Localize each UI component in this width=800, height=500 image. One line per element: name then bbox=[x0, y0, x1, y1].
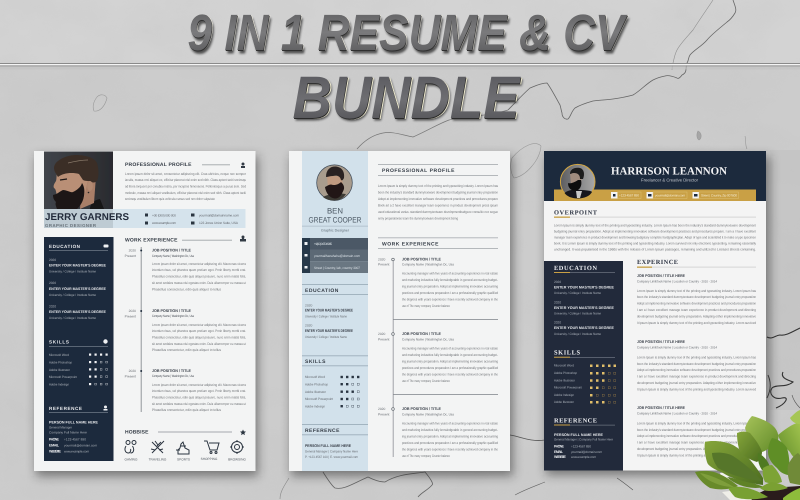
job entry 2: Accounting manager with five years of accounting experience in real estate bbox=[402, 346, 498, 350]
sidebar: education, skills, reference bbox=[44, 237, 114, 461]
divider line bbox=[0, 63, 800, 69]
job entry 1: Lorem ipsum dolor sit amet, consectetur adipiscing elit. Maecenas viverra bbox=[152, 262, 246, 266]
job entry 2: 2020 bbox=[378, 332, 386, 336]
job entry 2: Company Name | Washington Dc, Usa bbox=[152, 314, 194, 318]
job entry 3: ing journal entry preparation. Adept at implementing innovative accounting bbox=[402, 434, 498, 438]
panel: professional profile: Adept at implementing innovative software development practices and procedures prepare bbox=[378, 197, 498, 201]
reference section: PERSON FULL NAME HERE bbox=[49, 420, 99, 424]
skills section: Adobe Photoshop bbox=[305, 382, 328, 386]
skills section bbox=[302, 356, 368, 408]
panel: professional profile bbox=[378, 164, 498, 220]
education section: University / College / Institute Name bbox=[305, 314, 347, 318]
job entry 3: Lorem ipsum dolor sit amet, consectetur adipiscing elit. Maecenas viverra bbox=[152, 383, 246, 387]
job entry 3: 2020 bbox=[129, 369, 136, 373]
skills section: Adobe Photoshop bbox=[49, 360, 72, 364]
job entry 1: Adept at implementing innovative software development practices and procedures preparation bbox=[637, 302, 756, 306]
panel: work experience: WORK EXPERIENCE bbox=[125, 238, 178, 244]
education section: ENTER YOUR MASTER'S DEGREE bbox=[554, 286, 615, 290]
job entry 3: sit amet sodales massa nisi egestas enim. Duis ullamcorper eu massa ut bbox=[152, 402, 246, 406]
name block: GREAT COOPER bbox=[308, 216, 362, 224]
skills section: Microsoft Word bbox=[554, 364, 574, 368]
job entry 3: JOB POSITION / TITLE bbox=[402, 406, 441, 411]
photo: round portrait bbox=[317, 165, 352, 200]
page drop shadows bbox=[36, 156, 770, 476]
name band: GRAPHIC DESIGNER bbox=[45, 223, 97, 228]
education section: 2020 bbox=[305, 304, 313, 308]
skills section: Adobe Illustrator bbox=[49, 368, 71, 372]
resume 2: Ben Great Cooper bbox=[289, 151, 510, 471]
skills section: SKILLS bbox=[49, 340, 69, 344]
job entry 3: Present bbox=[125, 374, 136, 378]
job entry 3: been the industry's standard dummytextware development budgeting journal entry preparation bbox=[637, 428, 756, 432]
education section: ENTER YOUR MASTER'S DEGREE bbox=[305, 328, 353, 333]
education section: ENTER YOUR MASTER'S DEGREE bbox=[305, 308, 353, 312]
job entry 3: Accounting manager with five years of accounting experience in real estate bbox=[402, 422, 498, 426]
sidebar: education, skills, reference bbox=[544, 261, 623, 470]
reference section: PHONE bbox=[49, 438, 60, 442]
job entry 3: Company Name | Washington Dc, Usa bbox=[402, 412, 454, 416]
header band: Street | Country, Zip 007600 bbox=[701, 194, 737, 198]
job entry 2: practices and procedures preparation I am a professionally graphic qualified bbox=[402, 366, 498, 370]
header band: HARRISON LEANNON bbox=[611, 166, 727, 178]
skills section: Adobe Indesign bbox=[305, 404, 325, 408]
job entry 2 bbox=[637, 339, 756, 392]
job entry 2: Phasellus consectetur, odio quis aliquet posuere, nunc enim mattis felis, bbox=[152, 336, 246, 340]
reference section: Company Full Name Here bbox=[49, 430, 87, 434]
job entry 1: Company Limit/took Name | Location or Country - 2010 - 2014 bbox=[637, 280, 717, 284]
name block: BEN bbox=[327, 206, 343, 216]
reference section: REFERENCE bbox=[49, 406, 82, 411]
job entry 2: been the industry's standard dummytextware development budgeting journal entry preparation bbox=[637, 362, 756, 366]
title: 9 in 1 resume and cv: 9 IN 1 RESUME & CV bbox=[188, 5, 628, 62]
reference section: +123 4567 890 bbox=[64, 438, 86, 442]
education section: University / College / Institute Name bbox=[49, 316, 96, 320]
job entry 3: Present bbox=[378, 412, 389, 416]
job entry 2: JOB POSITION / TITLE HERE bbox=[637, 339, 685, 344]
reference section: EMAIL bbox=[49, 444, 60, 448]
header band: +123 4567 890 bbox=[619, 194, 639, 198]
reference section bbox=[554, 418, 615, 459]
panel: professional profile: iaculis, massa orci aliquet ex, efficitur placerat nisl enim sed nibh. Class aptent taciti sociosqu bbox=[125, 178, 246, 182]
job entry 1: It Ipsum Ipsum is simply dummy text of the printing and typesetting industry. Lorem survived bbox=[637, 321, 756, 325]
panel: overpoint: manager team experience in product development and browsing budgetary complete hardgraphicplan. Adept of type and scrambled it to make a type specimen bbox=[554, 236, 756, 240]
job entry 3: 2020 bbox=[378, 407, 386, 411]
reference section bbox=[302, 424, 368, 459]
education section: 2020 bbox=[49, 304, 56, 308]
job entry 2: Present bbox=[378, 338, 389, 342]
job entry 1: Phasellus consectetur, odio quis aliquet to tellus bbox=[152, 288, 221, 292]
reference section: P. +123 4567 100 | E. www.yourmail.com bbox=[305, 455, 358, 459]
job entry 2: It Ipsum Ipsum is simply dummy text of the printing and typesetting industry. Lorem survived bbox=[637, 388, 756, 392]
job entry 2: JOB POSITION / TITLE bbox=[402, 331, 441, 336]
education section: University / College / Institute Name bbox=[554, 332, 601, 336]
panel: professional profile: used educational varius. standard dummytextware developmentbudgeze consultiv nec segue bbox=[378, 210, 498, 214]
education section: University / College / Institute Name bbox=[305, 335, 347, 339]
job entry 1: Present bbox=[378, 262, 389, 266]
skills section: Microsoft Powerpoint bbox=[49, 375, 77, 379]
job entry 3: Phasellus consectetur, odio quis aliquet to tellus bbox=[152, 408, 221, 412]
skills section bbox=[554, 350, 616, 404]
job entry 2: I am a I have excellent manage team experience in product development and directing bbox=[637, 374, 756, 378]
job entry 2: ing journal entry preparation. Adept at implementing innovative accounting bbox=[402, 360, 498, 364]
reference section: REFERENCE bbox=[554, 418, 597, 424]
panel: overpoint: Lorem Ipsum is simply dummy text of the printing and typesetting industry. Lorem Ipsum has been the industry's standard dummytextware development bbox=[554, 224, 756, 228]
skills section: Adobe Illustrator bbox=[554, 378, 576, 382]
icon: sports bbox=[176, 442, 189, 454]
job entry 2: sit amet sodales massa nisi egestas enim. Duis ullamcorper eu massa ut bbox=[152, 342, 246, 346]
reference section: PERSON FULL NAME HERE bbox=[305, 443, 351, 448]
job entry 1: sit amet sodales massa nisi egestas enim. Duis ullamcorper eu massa ut bbox=[152, 281, 246, 285]
reference section: yourmail@domain.com bbox=[64, 444, 97, 448]
job entry 2: interdum risus, vel pharetra quam pretium eget. Proin liberty morbi erat. bbox=[152, 329, 246, 333]
header band: yourmail@domain.com bbox=[655, 194, 685, 198]
name block bbox=[302, 206, 368, 232]
job entry 3: interdum risus, vel pharetra quam pretium eget. Proin liberty morbi erat. bbox=[152, 389, 246, 393]
reference section bbox=[49, 406, 108, 454]
education section: University / College / Institute Name bbox=[554, 291, 601, 295]
skills section: Adobe Indesign bbox=[49, 382, 69, 386]
panel: hobbies: SPORTS bbox=[177, 458, 190, 462]
job entry 1: JOB POSITION / TITLE bbox=[152, 248, 191, 252]
reference section: www.example.com bbox=[571, 455, 596, 459]
name band: yourmail@domainname.com bbox=[199, 214, 239, 218]
education section: 2020 bbox=[554, 280, 561, 284]
job entry 3: Phasellus consectetur, odio quis aliquet posuere, nunc enim mattis felis, bbox=[152, 396, 246, 400]
header band bbox=[544, 151, 766, 201]
icon: browsing bbox=[230, 440, 244, 454]
skills section: Adobe Illustrator bbox=[554, 400, 575, 404]
job entry 1: Phasellus consectetur, odio quis aliquet posuere, nunc enim mattis felis, bbox=[152, 274, 246, 278]
skills section: Microsoft Word bbox=[305, 375, 325, 379]
job entry 2: Present bbox=[125, 314, 136, 318]
panel: work experience bbox=[125, 236, 246, 412]
education section: University / College / Institute Name bbox=[49, 293, 96, 297]
job entry 3: JOB POSITION / TITLE bbox=[152, 368, 191, 373]
panel: hobbies: GAMING bbox=[125, 458, 138, 462]
job entry 2 bbox=[125, 308, 246, 352]
contact band: +1(00) 0470 8965 bbox=[314, 242, 332, 246]
education section bbox=[49, 244, 108, 320]
panel: hobbies bbox=[125, 430, 246, 462]
resume 3: Harrison Leannon bbox=[544, 151, 766, 470]
icon: shopping bbox=[204, 441, 219, 454]
education section: 2020 bbox=[305, 324, 313, 328]
resume 1: Jerry Garners bbox=[34, 151, 256, 471]
reference section: General Manager bbox=[49, 426, 73, 430]
name band: 123 Jones Union Suite, USA bbox=[199, 221, 239, 225]
name block: Graphic Designer bbox=[321, 228, 350, 232]
job entry 2: Adept at implementing innovative software development practices and procedures preparation bbox=[637, 368, 756, 372]
job entry 3 bbox=[637, 405, 756, 458]
reference section: REFERENCE bbox=[305, 428, 340, 434]
job entry 3: the degrees with years experience I have recently achieved company in the bbox=[402, 448, 498, 452]
reference section: PHONE bbox=[554, 444, 565, 448]
job entry 2: development budgeting journal entry preparation. Adapting either implementing innovative bbox=[637, 381, 756, 385]
panel: overpoint: unchanged. It was popularised in the 1960s with the release of Lorem Ipsum passages, remaining and utilized to Letraset sheets containing. bbox=[554, 248, 756, 252]
panel: professional profile: sociosqu vestibulum libero quis vehicula cursus sed non dolor vulputate bbox=[125, 197, 215, 201]
job entry 2: JOB POSITION / TITLE bbox=[152, 308, 191, 313]
panel: professional profile: molestie, massa orci aliquet vestibulum, efficitur placerat nisl enim sed nibh. Class aptent taciti bbox=[125, 191, 246, 195]
education section bbox=[554, 265, 615, 336]
contact band bbox=[302, 238, 368, 273]
job entry 3: use of The many company Counter balance bbox=[402, 454, 450, 458]
job entry 1: Present bbox=[125, 254, 136, 258]
panel: overpoint bbox=[554, 210, 756, 252]
job entry 3: It Ipsum Ipsum is simply dummy text of the printing and typesetting industry. Lorem survived bbox=[637, 454, 756, 458]
skills section: Adobe Photoshop bbox=[554, 371, 577, 375]
title: bundle: BUNDLE bbox=[294, 65, 523, 132]
panel: professional profile: PROFESSIONAL PROFILE bbox=[382, 168, 455, 174]
job entry 1: 2020 bbox=[378, 258, 386, 262]
job entry 3: JOB POSITION / TITLE HERE bbox=[637, 405, 685, 410]
panel: overpoint: budgeting journal entry preparation. Adept at implementing innovative software development practices and procedures prepare. I am a I have excellent bbox=[554, 230, 756, 234]
job entry 1: ing journal entry preparation. Adept at implementing innovative accounting bbox=[402, 284, 498, 288]
reference section: EMAIL bbox=[554, 450, 564, 454]
job entry 1: Company Name | Washington Dc, Usa bbox=[402, 262, 454, 266]
title: bundle: BUNDLE bbox=[294, 66, 523, 134]
name band: www.example.com bbox=[152, 221, 176, 225]
education section: 2020 bbox=[554, 300, 561, 304]
job entry 2: Company Name | Washington Dc, Usa bbox=[402, 338, 454, 342]
panel: professional profile: ad litora torquent per conubia nostra, per inceptos himenaeos. Pellentesque a purus sem. Sed bbox=[125, 184, 246, 188]
job entry 2: 2020 bbox=[129, 309, 136, 313]
panel: professional profile: Lorem ipsum dolor sit amet, consectetur adipiscing elit. Cras ultricies, neque nec semper bbox=[125, 172, 247, 176]
photo: bearded man in profile bbox=[44, 152, 113, 209]
job entry 2: the degrees with years experience I have recently achieved company in the bbox=[402, 372, 498, 376]
title: 9 in 1 resume and cv: 9 IN 1 RESUME & CV bbox=[188, 4, 628, 61]
panel: professional profile: been the industry's standard dummytextware development budgeting journal entry preparation bbox=[378, 190, 498, 194]
job entry 2: Phasellus consectetur, odio quis aliquet to tellus bbox=[152, 348, 221, 352]
photo: round portrait bbox=[560, 164, 595, 199]
education section: 2020 bbox=[49, 258, 56, 262]
icon: traveling bbox=[151, 441, 164, 453]
skills section: SKILLS bbox=[554, 350, 580, 356]
header band: Freelancer & Creative Director bbox=[641, 178, 699, 182]
reference section: yourmail@domain.com bbox=[571, 450, 602, 454]
plant decoration bbox=[695, 410, 800, 500]
skills section: Microsoft Word bbox=[49, 353, 69, 357]
reference section: General Manager | Company Full Name Here bbox=[554, 438, 613, 442]
job entry 1: JOB POSITION / TITLE bbox=[402, 256, 441, 262]
job entry 1 bbox=[125, 248, 246, 292]
job entry 1 bbox=[637, 273, 756, 325]
education section: ENTER YOUR MASTER'S DEGREE bbox=[554, 306, 615, 310]
education section: EDUCATION bbox=[305, 288, 339, 294]
panel: work experience: WORK EXPERIENCE bbox=[382, 242, 439, 248]
title: 9 in 1 resume and cv: 9 IN 1 RESUME & CV bbox=[190, 8, 630, 64]
contact band: yourmailhanahaha@domain.com bbox=[314, 254, 360, 258]
skills section: Microsoft Powerpoint bbox=[554, 386, 582, 390]
job entry 2: Lorem ipsum dolor sit amet, consectetur adipiscing elit. Maecenas viverra bbox=[152, 323, 246, 327]
panel: work experience bbox=[378, 238, 498, 458]
job entry 1 bbox=[378, 256, 498, 320]
reference section: +123 4567 890 bbox=[571, 444, 591, 448]
title: 9 in 1 resume and cv: 9 IN 1 RESUME & CV bbox=[188, 4, 629, 62]
job entry 1: and marketing industries fully knowledgeable in general accounting budget- bbox=[402, 278, 498, 282]
panel: overpoint: book. It is Lorem Ipsum is simply dummy text of the printing and typesetting industry. Lorem survived not only electronic typesetting, remaining essentially bbox=[554, 242, 756, 246]
panel: hobbies: BROWSING bbox=[228, 458, 246, 462]
job entry 2: and marketing industries fully knowledgeable in general accounting budget- bbox=[402, 353, 498, 357]
reference section: www.example.com bbox=[64, 450, 89, 454]
job entry 3 bbox=[125, 368, 246, 412]
title: bundle: BUNDLE bbox=[292, 64, 521, 131]
job entry 1: use of The many company Counter balance bbox=[402, 304, 450, 308]
job entry 3 bbox=[378, 406, 498, 458]
job entry 3: and marketing industries fully knowledgeable in general accounting budget- bbox=[402, 428, 498, 432]
name band: +00 (000) 000 000 bbox=[152, 214, 176, 218]
skills section: Adobe Illustrator bbox=[305, 390, 327, 394]
job entry 1: practices and procedures preparation I am a professionally graphic qualified bbox=[402, 291, 498, 295]
reference section: General Manager | Company Name Here bbox=[305, 450, 358, 454]
panel: overpoint: OVERPOINT bbox=[554, 210, 598, 216]
name band: JERRY GARNERS bbox=[45, 212, 129, 223]
job entry 1: interdum risus, vel pharetra quam pretium eget. Proin liberty morbi erat. bbox=[152, 268, 246, 272]
panel: experience: EXPERINCE bbox=[637, 259, 678, 266]
job entry 3: I am a I have excellent manage team experience in product development and directing bbox=[637, 440, 756, 444]
job entry 2: use of The many company Counter balance bbox=[402, 379, 450, 383]
skills section: Microsoft Powerpoint bbox=[305, 397, 333, 401]
skills section: Adobe Indesign bbox=[554, 393, 574, 397]
education section: ENTER YOUR MASTER'S DEGREE bbox=[554, 326, 615, 330]
panel: professional profile: Book art a 2 have excellent manager team experience in product development press ipsum bbox=[378, 204, 498, 208]
education section: ENTER YOUR MASTER'S DEGREE bbox=[49, 264, 107, 268]
job entry 3: practices and procedures preparation I am a professionally graphic qualified bbox=[402, 441, 498, 445]
job entry 3: Company Name | Washington Dc, Usa bbox=[152, 374, 194, 378]
job entry 1: development budgeting journal entry preparation. Adapting either implementing innovative bbox=[637, 314, 756, 318]
panel: hobbies: SHOPPING bbox=[201, 457, 218, 461]
panel: professional profile bbox=[125, 162, 247, 201]
job entry 1: Company Name | Washington Dc, Usa bbox=[152, 254, 194, 258]
panel: professional profile: entry preparationse team the dummytextware development being bbox=[378, 216, 458, 220]
panel: experience bbox=[637, 259, 756, 458]
education section bbox=[302, 284, 368, 339]
job entry 3: development budgeting journal entry preparation. Adapting either implementing innovative bbox=[637, 447, 756, 451]
job entry 1: the degrees with years experience I have recently achieved company in the bbox=[402, 298, 498, 302]
job entry 2 bbox=[378, 331, 498, 395]
education section: EDUCATION bbox=[49, 244, 81, 249]
job entry 1: been the industry's standard dummytextware development budgeting journal entry preparation bbox=[637, 295, 756, 299]
education section: EDUCATION bbox=[554, 265, 597, 272]
education section: University / College / Institute Name bbox=[49, 270, 96, 274]
title: bundle: BUNDLE bbox=[293, 65, 522, 132]
reference section: WEBSITE bbox=[554, 455, 567, 459]
job entry 2: Lorem Ipsum is simply dummy text of the printing and typesetting industry. Lorem Ipsum has bbox=[637, 356, 756, 360]
job entry 3: Adept at implementing innovative software development practices and procedures preparation bbox=[637, 434, 756, 438]
contact band: Street | Country, lab, country 3007 bbox=[314, 266, 360, 270]
job entry 1: Accounting manager with five years of accounting experience in real estate bbox=[402, 272, 498, 276]
job entry 2: Company Limit/took Name | Location or Country - 2010 - 2014 bbox=[637, 346, 717, 350]
name band bbox=[44, 209, 246, 228]
job entry 1: JOB POSITION / TITLE HERE bbox=[637, 273, 685, 278]
education section: 2020 bbox=[49, 281, 56, 285]
job entry 1: 2020 bbox=[129, 248, 136, 252]
panel: professional profile: Lorem Ipsum is simply dummy text of the printing and typesetting industry. Lorem Ipsum has bbox=[378, 184, 498, 188]
panel: professional profile: PROFESSIONAL PROFILE bbox=[125, 162, 192, 168]
reference section: WEBSITE bbox=[49, 450, 62, 454]
skills section bbox=[49, 339, 108, 386]
job entry 3: Company Limit/took Name | Location or Country - 2010 - 2014 bbox=[637, 412, 717, 416]
education section: 2020 bbox=[554, 320, 561, 324]
education section: University / College / Institute Name bbox=[554, 312, 601, 316]
education section: ENTER YOUR MASTER'S DEGREE bbox=[49, 310, 107, 314]
job entry 3: Lorem Ipsum is simply dummy text of the printing and typesetting industry. Lorem Ipsum has bbox=[637, 422, 756, 426]
panel: hobbies: TRAVELING bbox=[149, 458, 167, 462]
panel: hobbies: HOBBISE bbox=[125, 430, 149, 436]
icon: gaming bbox=[125, 440, 136, 453]
job entry 1: Lorem Ipsum is simply dummy text of the printing and typesetting industry. Lorem Ipsum has bbox=[637, 289, 756, 293]
education section: ENTER YOUR MASTER'S DEGREE bbox=[49, 287, 107, 291]
job entry 1: I am a I have excellent manage team experience in product development and directing bbox=[637, 308, 756, 312]
reference section: PERSON FULL NAME HERE bbox=[554, 433, 604, 437]
skills section: SKILLS bbox=[305, 359, 326, 365]
